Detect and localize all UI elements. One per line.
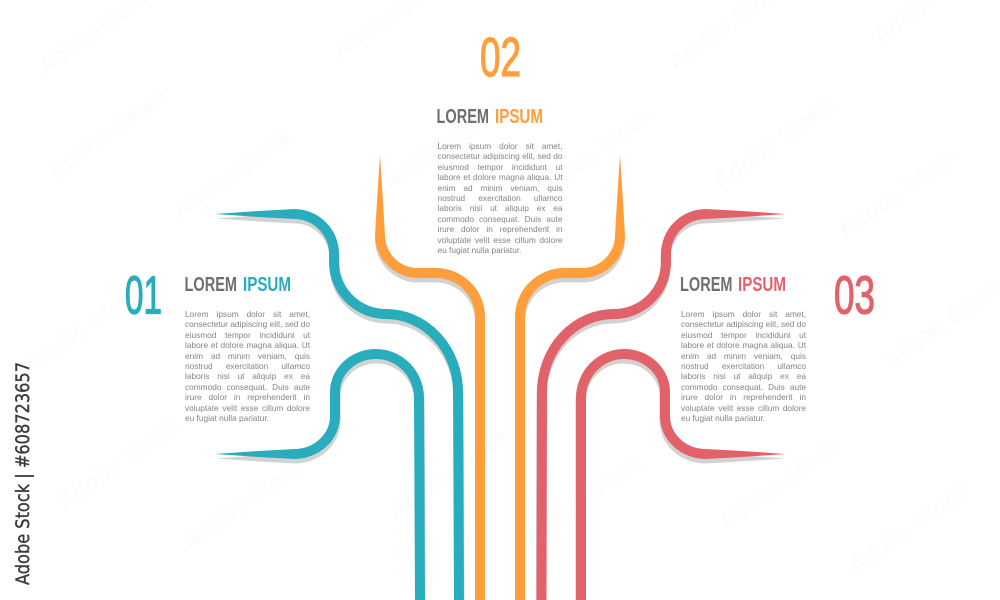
text block: section 01: irure dolor in reprehenderit in xyxy=(185,392,310,402)
text block: section 01: eu fugiat nulla pariatur. xyxy=(185,413,269,423)
text block: section 03: consectetur adipiscing elit, sed do xyxy=(681,319,806,329)
text block: section 02: labore et dolore magna aliqua. Ut xyxy=(438,172,562,182)
text block: section 01: labore et dolore magna aliqua. Ut xyxy=(185,340,310,350)
text block: section 03: irure dolor in reprehenderit in xyxy=(681,392,806,402)
heading: section 01 xyxy=(184,274,291,296)
heading: section 02: LOREM xyxy=(436,106,489,128)
text block: section 03: enim ad minim veniam, quis xyxy=(681,351,806,361)
text block: section 03: laboris nisi ut aliquip ex ea xyxy=(681,371,806,381)
heading: section 03: IPSUM xyxy=(738,274,786,296)
heading: section 02: IPSUM xyxy=(495,106,543,128)
heading: section 03 xyxy=(680,274,786,296)
text block: section 01: voluptate velit esse cillum dolore xyxy=(185,403,310,413)
text block: section 01: eiusmod tempor incididunt ut xyxy=(185,330,310,340)
text block: section 02: eiusmod tempor incididunt ut xyxy=(438,162,562,172)
text block: section 02: eu fugiat nulla pariatur. xyxy=(438,245,521,255)
text block: section 01: commodo consequat. Duis aute xyxy=(185,382,310,392)
text block: section 01: Lorem ipsum dolor sit amet, xyxy=(185,309,310,319)
heading: section 03: LOREM xyxy=(680,274,732,296)
text block: section 03: eiusmod tempor incididunt ut xyxy=(681,330,806,340)
text block: section 03: voluptate velit esse cillum dolore xyxy=(681,403,806,413)
number 03: 03 xyxy=(834,266,875,326)
heading: section 02 xyxy=(436,106,543,128)
text block: section 03: labore et dolore magna aliqua. Ut xyxy=(681,340,806,350)
text block: section 02: laboris nisi ut aliquip ex ea xyxy=(438,203,562,213)
text block: section 02: voluptate velit esse cillum dolore xyxy=(438,235,562,245)
red lower branch line xyxy=(580,354,785,600)
orange left branch line xyxy=(375,155,480,600)
text block: section 02: enim ad minim veniam, quis xyxy=(438,183,562,193)
text block: section 01: laboris nisi ut aliquip ex ea xyxy=(185,371,310,381)
text block: section 02: Lorem ipsum dolor sit amet, xyxy=(438,141,562,151)
teal lower branch line xyxy=(215,354,421,600)
teal upper branch line xyxy=(215,209,460,600)
text block: section 03 xyxy=(681,309,806,423)
text block: section 02: nostrud exercitation ullamco xyxy=(438,193,562,203)
text block: section 03: nostrud exercitation ullamco xyxy=(681,361,806,371)
text block: section 03: eu fugiat nulla pariatur. xyxy=(681,413,765,423)
text block: section 02: commodo consequat. Duis aute xyxy=(438,214,562,224)
red upper branch line xyxy=(541,209,785,600)
text block: section 03: Lorem ipsum dolor sit amet, xyxy=(681,309,806,319)
text block: section 03: commodo consequat. Duis aute xyxy=(681,382,806,392)
heading: section 01: LOREM xyxy=(184,274,237,296)
text block: section 01: nostrud exercitation ullamco xyxy=(185,361,310,371)
orange right branch line xyxy=(520,155,625,600)
text block: section 02: irure dolor in reprehenderit in xyxy=(438,224,562,234)
text block: section 01 xyxy=(185,309,310,423)
heading: section 01: IPSUM xyxy=(243,274,291,296)
number 02: 02 xyxy=(480,26,521,88)
stock id vertical text: Adobe Stock | #608723657 xyxy=(12,362,34,585)
number 01: 01 xyxy=(125,266,162,326)
text block: section 02 xyxy=(438,141,562,255)
text block: section 01: consectetur adipiscing elit, sed do xyxy=(185,319,310,329)
text block: section 02: consectetur adipiscing elit, sed do xyxy=(438,151,562,161)
text block: section 01: enim ad minim veniam, quis xyxy=(185,351,310,361)
